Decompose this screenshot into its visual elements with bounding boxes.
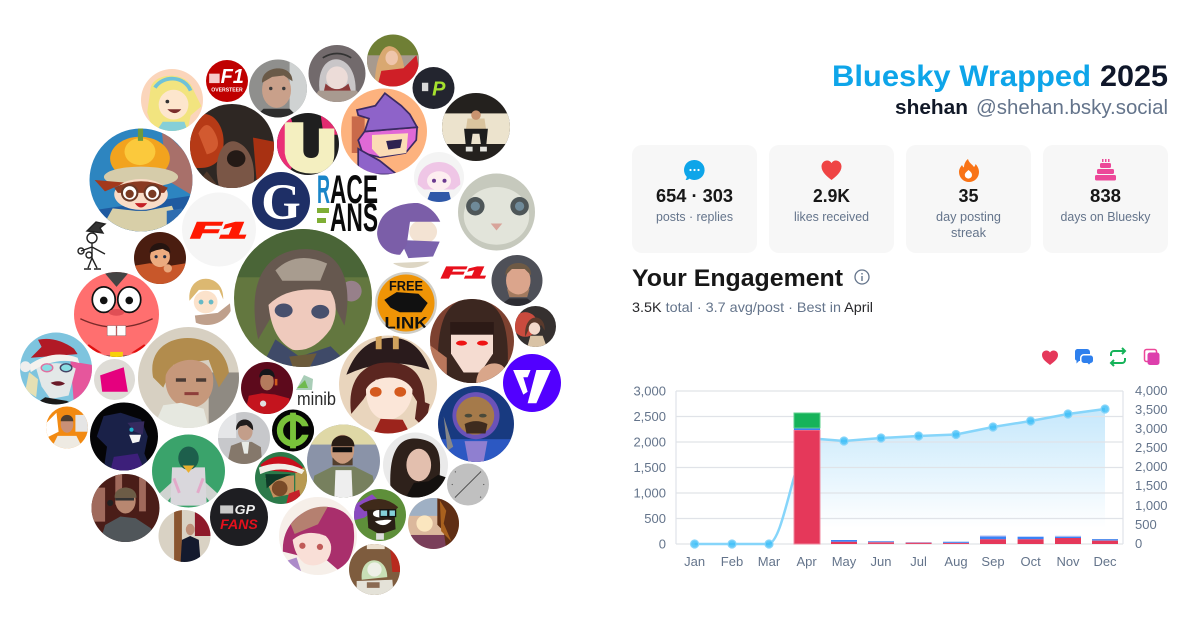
avatar: broken minib image <box>296 375 336 409</box>
avatar: singer with microphone <box>92 474 160 542</box>
avatar: free link badge: FREE <box>389 279 423 295</box>
avatar: F1 logo on grey: F1 <box>191 218 247 243</box>
icon: heart <box>822 160 842 180</box>
avatar: Guardian G logo: G <box>261 174 301 230</box>
avatar: Santa-hat green-hair man <box>255 452 307 504</box>
month labels <box>684 554 1117 569</box>
month labels: Nov <box>1056 554 1080 569</box>
month labels: Feb <box>721 554 743 569</box>
avatar: P logo <box>412 67 454 109</box>
avatar: Guardian G logo <box>252 172 310 230</box>
avatar: RaceFans logo: ANS <box>330 196 378 240</box>
avatar: stick figure with witch hat <box>78 222 105 269</box>
panel: days on Bluesky stat: days on Bluesky <box>1060 209 1151 224</box>
panel: streak stat <box>906 145 1031 253</box>
avatar: blond elf <box>189 278 231 325</box>
avatar: magenta-haired anime girl <box>279 497 357 575</box>
month labels: Oct <box>1020 554 1041 569</box>
avatar: white cat <box>458 174 535 250</box>
right axis labels: 1,500 <box>1135 478 1168 493</box>
right axis labels: 4,000 <box>1135 383 1168 398</box>
avatar: U artwork <box>277 113 339 175</box>
avatar: racer in red suit <box>241 362 293 414</box>
right axis labels: 3,000 <box>1135 421 1168 436</box>
avatar: F1 Oversteer logo <box>206 60 248 102</box>
user name and handle: shehan <box>895 97 968 119</box>
left axis labels: 0 <box>659 536 666 552</box>
right axis labels <box>1135 383 1168 551</box>
legend icons <box>1042 348 1160 366</box>
avatar: man with long dark hair <box>383 432 448 498</box>
avatar: long-haired doll girl <box>430 299 514 383</box>
left axis labels: 1,000 <box>633 486 666 500</box>
avatar: dark furry character <box>90 402 158 470</box>
heading: Your Engagement: Your Engagement <box>632 265 843 292</box>
avatar: grey placeholder <box>447 464 489 506</box>
avatar: man in green jacket with sunglasses <box>307 424 380 498</box>
avatar: orange-background man <box>46 406 88 448</box>
panel: posts and replies stat: 654 · 303 <box>656 186 733 206</box>
cumulative area <box>769 409 1105 544</box>
month labels: Aug <box>944 554 968 569</box>
avatar: green-haired girl <box>349 544 400 595</box>
user name and handle: @shehan.bsky.social <box>976 97 1168 119</box>
avatar: pumpkin explorer <box>90 128 192 232</box>
avatar: GP Fans logo: GP <box>235 502 255 517</box>
avatar: P logo: P <box>432 78 446 100</box>
right axis labels: 2,500 <box>1135 440 1168 455</box>
avatar: bearded cartoon with glasses <box>354 489 406 541</box>
right axis labels: 2,000 <box>1135 459 1168 474</box>
icon: replies legend <box>1075 349 1093 364</box>
icon: quotes legend <box>1144 350 1160 365</box>
avatar: GP Fans logo <box>210 488 268 546</box>
stacked bars <box>794 413 1118 544</box>
panel: likes stat: 2.9K <box>813 186 850 206</box>
month labels: Jan <box>684 554 705 569</box>
avatar: F1 logo on grey <box>182 192 256 266</box>
chart: monthly engagement <box>633 383 1168 569</box>
left axis labels <box>633 384 666 552</box>
left axis labels: 2,000 <box>633 434 666 450</box>
avatar: anime girl with dark hat <box>339 336 437 434</box>
avatar: pixel witch <box>341 88 427 174</box>
avatar: green C logo <box>272 410 314 452</box>
panel: posts and replies stat <box>632 145 757 253</box>
icon: heart legend <box>1042 350 1058 365</box>
avatar: Verge V logo <box>503 354 561 412</box>
right axis labels: 3,500 <box>1135 402 1168 417</box>
avatar: pink-haired chibi <box>414 152 464 202</box>
avatar: man on white sofa <box>442 93 510 161</box>
avatar: RaceFans logo <box>317 168 378 240</box>
panel: days on Bluesky stat <box>1043 145 1168 253</box>
avatar: man in suit <box>158 510 210 562</box>
left axis labels: 500 <box>644 511 666 526</box>
avatar: brown-haired man leaning on hand <box>134 232 186 284</box>
title: Bluesky Wrapped <box>832 60 1091 93</box>
avatar: free link badge <box>375 272 437 334</box>
avatar: pink logo on grey <box>94 359 135 400</box>
panel: likes stat: likes received <box>794 209 869 224</box>
avatar: blond man in turtleneck <box>138 327 239 428</box>
panel: days on Bluesky stat: 838 <box>1090 186 1121 206</box>
title: 2025 <box>1100 60 1168 93</box>
avatar: RaceFans logo: R <box>317 168 330 212</box>
month labels: May <box>832 554 857 569</box>
month labels: Dec <box>1093 554 1117 569</box>
cumulative line <box>695 409 1105 544</box>
avatar: dark dog photo <box>190 104 274 188</box>
avatar: Harley in Santa hat <box>20 332 92 404</box>
panel: streak stat: 35 <box>958 186 978 206</box>
icon: flame <box>959 159 979 182</box>
panel: likes stat <box>769 145 894 253</box>
avatar: penguin in green <box>152 434 225 508</box>
avatar: broken minib image: minib <box>297 389 336 409</box>
left axis labels: 3,000 <box>633 384 666 398</box>
line data points <box>691 405 1109 548</box>
icon: repost legend <box>1111 348 1125 366</box>
avatar: blond girl <box>141 69 203 131</box>
avatar: grey-haired anime girl <box>308 45 366 102</box>
left axis labels: 2,500 <box>633 409 666 424</box>
avatar: Mii in space helmet <box>438 386 514 462</box>
avatar: ginger bearded man <box>492 255 542 306</box>
panel: posts and replies stat: posts · replies <box>656 209 733 224</box>
icon: info <box>855 270 869 284</box>
avatar: F1 Oversteer logo: F1 <box>221 66 244 88</box>
user name and handle <box>895 97 1168 119</box>
avatar: man with raised brow <box>249 59 307 118</box>
month labels: Sep <box>981 554 1005 569</box>
avatar: big anime boy <box>234 229 372 367</box>
avatar: cliff sunset <box>408 498 459 549</box>
avatar: pink mascot with teeth <box>74 272 159 358</box>
chart grid <box>676 391 1123 544</box>
avatar: purple hooded ninja <box>377 202 443 268</box>
month labels: Jul <box>910 554 927 569</box>
right axis labels: 1,000 <box>1135 498 1168 513</box>
month labels: Apr <box>796 554 817 569</box>
avatar: illustrated girl with headset <box>513 306 556 347</box>
avatar: GP Fans logo: FANS <box>220 516 259 532</box>
avatar: man with dark hair in grey blazer <box>218 412 270 464</box>
panel: streak stat: streak <box>951 225 986 240</box>
avatar: RaceFans logo: ACE <box>330 168 378 212</box>
engagement summary: 3.5K total · 3.7 avg/post · Best in April <box>632 299 873 315</box>
month labels: Mar <box>758 554 781 569</box>
avatar: girl in red jacket <box>367 34 419 86</box>
icon: cake <box>1095 159 1116 180</box>
left axis labels: 1,500 <box>633 460 666 475</box>
panel: avatar bubble cluster <box>20 34 561 595</box>
icon: chat bubble <box>684 160 705 180</box>
month labels: Jun <box>871 554 891 569</box>
avatar: free link badge: LINK <box>384 313 428 332</box>
avatar: small F1 logo: F1 <box>442 265 487 282</box>
right axis labels: 0 <box>1135 536 1142 551</box>
avatar: F1 Oversteer logo: OVERSTEER <box>211 88 243 94</box>
right axis labels: 500 <box>1135 517 1157 532</box>
panel: streak stat: day posting <box>936 209 1001 224</box>
